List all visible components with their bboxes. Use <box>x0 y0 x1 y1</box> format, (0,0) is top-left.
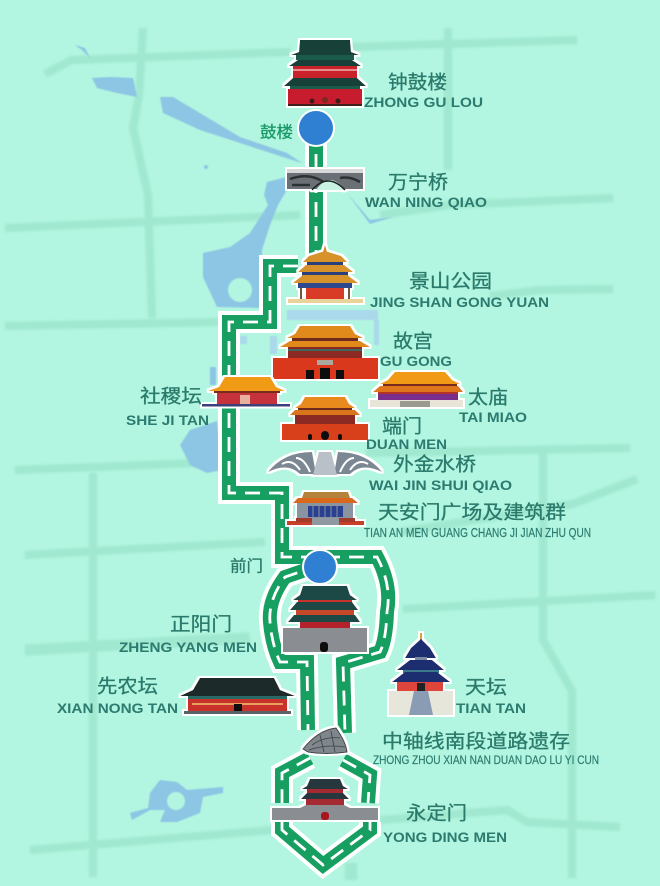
label: 天坛 <box>456 676 526 716</box>
building: Xian Nong Tan <box>180 678 295 714</box>
building: Wai Jin Shui Qiao <box>268 452 382 475</box>
label: 先农坛 <box>57 676 178 716</box>
building: Tian Tan <box>389 633 453 715</box>
label: 万宁桥: WAN NING QIAO <box>365 194 487 210</box>
route line <box>229 130 388 865</box>
building: Zheng Yang Men <box>283 586 367 652</box>
building: Tai Miao <box>370 372 463 407</box>
label: 太庙 <box>459 386 527 425</box>
label: 中轴线南段道路遗存: ZHONG ZHOU XIAN NAN DUAN DAO LU YI CUN <box>373 753 599 767</box>
building: Duan Men <box>282 397 368 440</box>
label: 钟鼓楼 <box>364 72 483 110</box>
building: south axis road remains <box>303 728 347 754</box>
label: 端门: DUAN MEN <box>366 436 447 452</box>
label: 外金水桥: 外金水桥 <box>393 454 476 476</box>
route lane dashes <box>229 130 388 865</box>
label: 鼓楼 station: 鼓楼 <box>260 124 293 142</box>
label: 社稷坛: 社稷坛 <box>140 386 202 408</box>
label: 景山公园: 景山公园 <box>409 270 492 292</box>
station: Qianmen <box>303 550 337 584</box>
label: 永定门 <box>383 802 507 845</box>
label: 先农坛: 先农坛 <box>97 676 158 698</box>
label: 端门: 端门 <box>382 416 422 438</box>
label: 先农坛: XIAN NONG TAN <box>57 700 178 716</box>
label: 永定门: 永定门 <box>406 802 467 824</box>
label: 钟鼓楼: 钟鼓楼 <box>388 72 447 94</box>
building: Zhong Gu Lou <box>284 40 366 106</box>
building: Tiananmen Square complex <box>287 492 364 525</box>
station: Gulou <box>298 110 334 146</box>
label: 外金水桥: WAI JIN SHUI QIAO <box>369 477 512 493</box>
label: 天安门广场及建筑群 <box>364 502 591 540</box>
label: 中轴线南段道路遗存: 中轴线南段道路遗存 <box>382 730 570 752</box>
label: 万宁桥: 万宁桥 <box>388 172 448 194</box>
building: Wan Ning Qiao <box>287 169 363 190</box>
label: 景山公园: JING SHAN GONG YUAN <box>370 294 549 310</box>
label: 故宫: GU GONG <box>380 353 452 369</box>
label: 中轴线南段道路遗存 <box>373 730 599 767</box>
label: 外金水桥 <box>369 454 512 493</box>
route green road <box>229 130 388 865</box>
label: 天坛: 天坛 <box>465 676 507 698</box>
building: She Ji Tan <box>202 377 290 406</box>
building: Gu Gong <box>273 326 378 379</box>
label: 社稷坛: SHE JI TAN <box>126 412 209 428</box>
label: 正阳门: 正阳门 <box>170 614 232 636</box>
label: 故宫 <box>380 330 452 369</box>
label: 天安门广场及建筑群: 天安门广场及建筑群 <box>378 502 566 524</box>
route outline <box>229 130 388 865</box>
label: 太庙: TAI MIAO <box>459 409 527 425</box>
label: 正阳门 <box>119 614 257 655</box>
label: 景山公园 <box>370 270 549 310</box>
label: 太庙: 太庙 <box>468 386 508 408</box>
label: 前门 station: 前门 <box>230 558 263 576</box>
building: Jing Shan pavilion <box>288 245 363 303</box>
label: 端门 <box>366 416 447 452</box>
water bodies <box>75 45 393 822</box>
label: 社稷坛 <box>126 386 209 428</box>
label: 天安门广场及建筑群: TIAN AN MEN GUANG CHANG JI JIAN ZHU QUN <box>364 525 591 540</box>
label: 故宫: 故宫 <box>393 330 433 352</box>
building: Yong Ding Men <box>272 779 378 820</box>
label: 永定门: YONG DING MEN <box>383 829 507 845</box>
label: 天坛: TIAN TAN <box>456 700 526 716</box>
label: 万宁桥 <box>365 172 487 210</box>
label: 钟鼓楼: ZHONG GU LOU <box>364 94 483 110</box>
label: 正阳门: ZHENG YANG MEN <box>119 639 257 655</box>
